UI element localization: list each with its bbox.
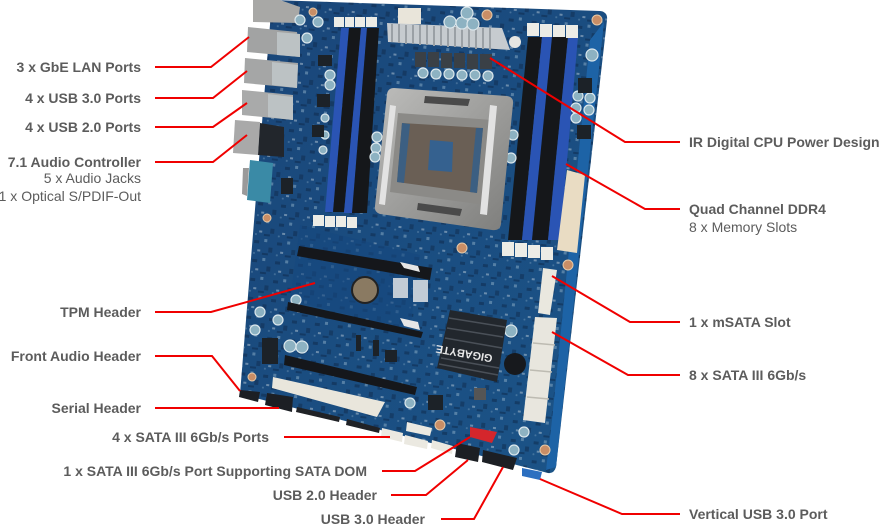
callout: 4 x USB 2.0 Ports: [25, 103, 247, 135]
callout: SATA DOM Port: [63, 437, 470, 479]
vertical USB 3.0 port: [522, 468, 542, 480]
motherboard: [233, 0, 607, 480]
callout: USB 2.0 Header: USB 2.0 Header: [273, 487, 378, 503]
callout: USB 3.0 Header: [321, 467, 503, 524]
left memory slots: [313, 17, 379, 228]
callout: 8 x SATA III 6Gb/s: [552, 332, 806, 383]
callout: TPM Header: [60, 283, 315, 320]
buzzer: [504, 353, 526, 375]
right memory slots: [502, 23, 578, 260]
callout: Vertical USB 3.0 Port: Vertical USB 3.0 Port: [689, 506, 828, 522]
callout: 3 x GbE LAN Ports: [17, 37, 249, 75]
CPU power heatsink: [387, 23, 521, 50]
rear IO ports: [233, 0, 300, 203]
callout: USB 2.0 Header: [273, 460, 468, 503]
callout: 4 x USB 3.0 Ports: 4 x USB 3.0 Ports: [25, 90, 141, 106]
callout: Quad Channel DDR4: Quad Channel DDR4: [689, 201, 826, 217]
callout: 4 x USB 2.0 Ports: 4 x USB 2.0 Ports: [25, 119, 141, 135]
callout: 8 x SATA III 6Gb/s: 8 x SATA III 6Gb/s: [689, 367, 806, 383]
callout: Front Audio Header: Front Audio Header: [11, 348, 142, 364]
small SATA ports: [381, 422, 453, 454]
callout: 7.1 Audio Controller: [0, 135, 247, 204]
chipset heatsink: [435, 310, 507, 382]
GIGABYTE logo: GIGABYTE: [435, 342, 494, 364]
callout: 7.1 Audio Controller: 5 x Audio Jacks: [44, 170, 141, 186]
USB 2.0 header: [455, 443, 480, 462]
callout: Front Audio Header: [11, 348, 240, 391]
mSATA slot: [538, 268, 557, 315]
callout: Quad Channel DDR4: [566, 164, 826, 235]
callout: IR Digital CPU Power Design: [490, 58, 879, 150]
PCIe slots: [284, 246, 432, 395]
callout: Vertical USB 3.0 Port: [540, 479, 828, 522]
callout: TPM Header: TPM Header: [60, 304, 142, 320]
callout: Quad Channel DDR4: 8 x Memory Slots: [689, 219, 797, 235]
battery: [352, 277, 378, 303]
mounting holes: [248, 8, 602, 455]
board PCB: [240, 0, 607, 473]
power stages: [415, 52, 492, 69]
callout: 3 x GbE LAN Ports: 3 x GbE LAN Ports: [17, 59, 141, 75]
SATA stack: [523, 317, 557, 423]
callout: Serial Header: Serial Header: [52, 400, 142, 416]
capacitors: [250, 7, 598, 455]
PCI slot: [272, 377, 385, 417]
pin headers: [296, 407, 380, 433]
callout: 1 x mSATA Slot: 1 x mSATA Slot: [689, 314, 791, 330]
CPU socket: [375, 88, 513, 230]
callout: 1 x mSATA Slot: [552, 276, 791, 330]
8-pin power connector: [398, 8, 421, 24]
callout: IR Digital CPU Power Design: IR Digital CPU Power Design: [689, 134, 879, 150]
ATI and SLI logos: [393, 278, 428, 302]
callout: 4 x USB 3.0 Ports: [25, 71, 247, 106]
callout: 7.1 Audio Controller: 1 x Optical S/PDIF-Out: [0, 188, 141, 204]
serial header: [265, 393, 293, 412]
small chips: [262, 55, 592, 410]
callout: 7.1 Audio Controller: 7.1 Audio Controller: [8, 154, 142, 170]
callout: SATA DOM Port: 1 x SATA III 6Gb/s Port Supporting SATA DOM: [63, 463, 367, 479]
callout: 4 x SATA III Ports: 4 x SATA III 6Gb/s Ports: [112, 429, 269, 445]
ATX power connector: [557, 170, 585, 253]
red SATA DOM port: [470, 427, 497, 443]
USB 3.0 header: [482, 450, 517, 470]
front audio header: [239, 390, 260, 402]
